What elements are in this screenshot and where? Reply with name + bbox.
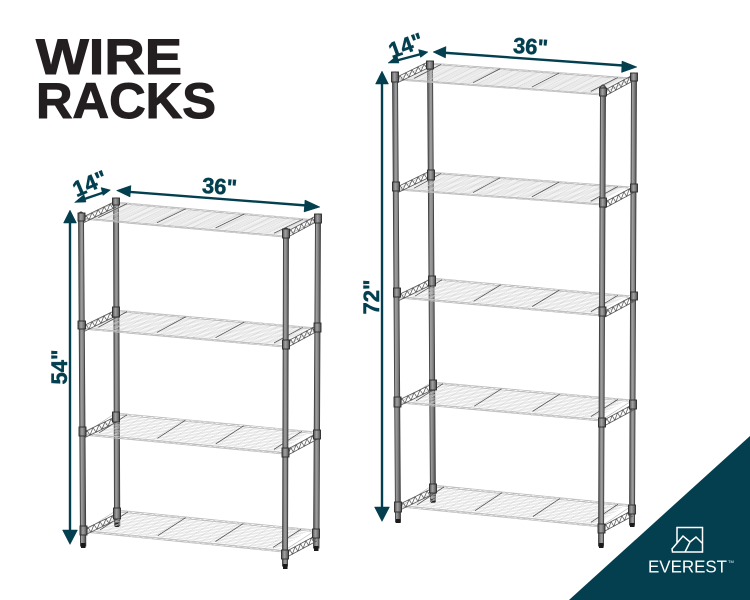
dimension arrow: 72 inch	[374, 71, 390, 522]
shelf 2	[81, 310, 318, 347]
front posts	[78, 212, 290, 569]
dimension arrow: 14 inch right rack	[388, 50, 428, 63]
shelf 3	[398, 278, 633, 316]
dimension arrow: 36 inch right rack	[433, 46, 637, 72]
wire rack: 54 inch, four shelves	[78, 198, 322, 569]
title: RACKS	[36, 73, 216, 129]
brand name: EVEREST	[648, 556, 727, 576]
back post sleeves	[112, 198, 322, 538]
shelf 4	[399, 382, 633, 421]
end trusses	[397, 61, 635, 532]
dimension arrow: 14 inch left rack	[74, 188, 110, 202]
dimension arrow: 54 inch	[62, 210, 78, 544]
label: 36 inch right: 36"	[512, 33, 549, 60]
wire rack: 72 inch, five shelves	[392, 61, 638, 548]
title	[36, 29, 216, 129]
label: 72 inch: 72"	[359, 280, 384, 314]
shelf 1	[81, 202, 318, 237]
label: 36 inch left: 36"	[201, 173, 238, 200]
back posts	[428, 62, 636, 527]
front posts	[392, 72, 606, 548]
corner panel: brand triangle	[569, 436, 750, 600]
label: 14 inch left: 14"	[69, 165, 111, 202]
shelf 2	[397, 172, 633, 205]
back post sleeves	[426, 61, 638, 514]
trademark: TM	[728, 559, 734, 564]
shelf 3	[82, 413, 317, 454]
icon: Everest mountain logo	[672, 528, 702, 552]
title: WIRE	[36, 29, 182, 85]
dimension arrow: 36 inch left rack	[116, 186, 320, 212]
back posts	[114, 198, 320, 551]
label: 14 inch right: 14"	[385, 28, 427, 63]
shelf 1	[397, 63, 633, 95]
label: 54 inch: 54"	[47, 350, 72, 384]
end trusses	[83, 201, 318, 557]
shelf 5	[400, 485, 633, 527]
shelf 4	[83, 510, 316, 552]
